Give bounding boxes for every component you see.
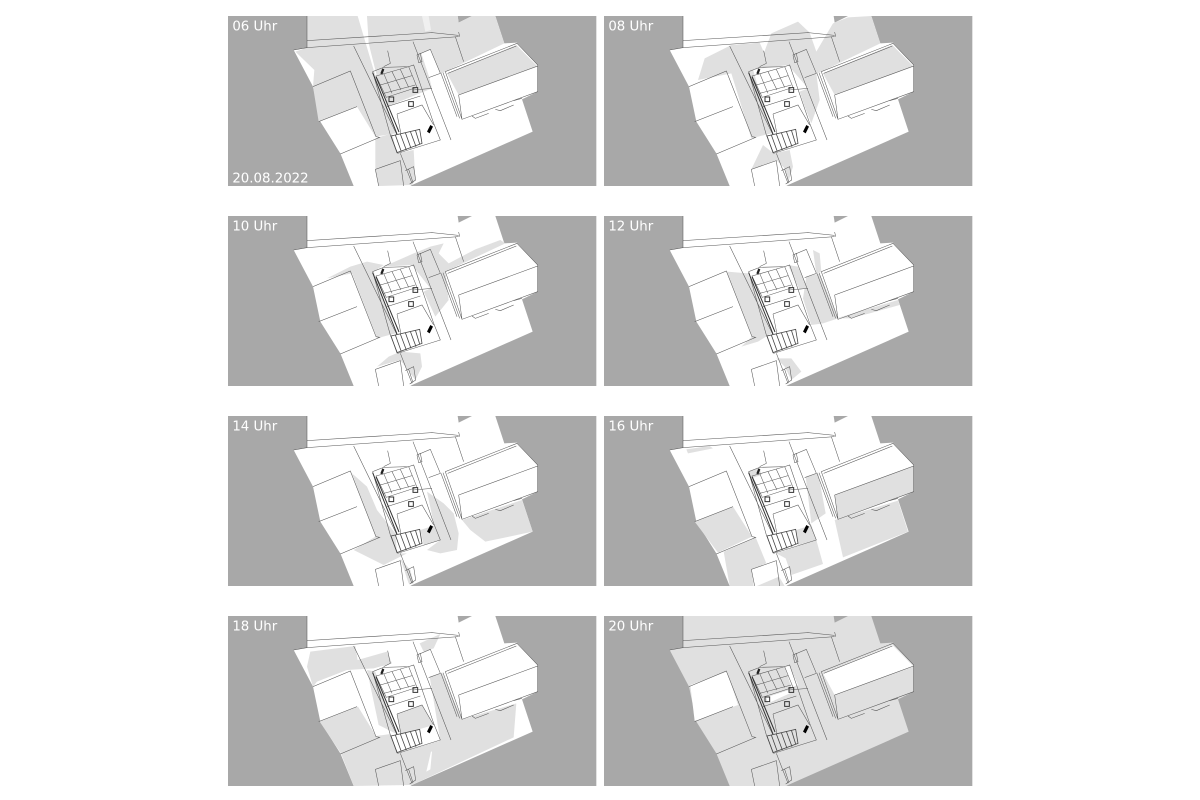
label: 18 Uhr: 18 Uhr xyxy=(232,620,278,635)
label: 08 Uhr: 08 Uhr xyxy=(608,20,654,35)
shadows 18 Uhr xyxy=(307,634,516,786)
label: 20 Uhr: 20 Uhr xyxy=(608,620,654,635)
label: 10 Uhr: 10 Uhr xyxy=(232,220,278,235)
shadows 08 Uhr xyxy=(698,16,914,183)
panel: 10 Uhr xyxy=(228,216,596,386)
panel: 14 Uhr xyxy=(228,416,596,586)
shadows 12 Uhr xyxy=(727,250,900,380)
shadows 14 Uhr xyxy=(352,473,533,583)
label: 14 Uhr: 14 Uhr xyxy=(232,420,278,435)
panel: 12 Uhr xyxy=(604,216,972,386)
shadows 06 Uhr xyxy=(295,16,538,186)
sunlit surfaces 20 Uhr xyxy=(690,645,914,721)
label: 12 Uhr: 12 Uhr xyxy=(608,220,654,235)
panel: 20 Uhr xyxy=(604,616,972,786)
shadows 10 Uhr xyxy=(327,240,505,380)
panel: 06 Uhr xyxy=(228,16,596,187)
panel: 16 Uhr xyxy=(604,416,972,586)
label: 06 Uhr: 06 Uhr xyxy=(232,20,278,35)
panel: 18 Uhr xyxy=(228,616,596,786)
label: date: 20.08.2022 xyxy=(232,172,309,187)
panel: 08 Uhr xyxy=(604,16,972,186)
label: 16 Uhr: 16 Uhr xyxy=(608,420,654,435)
shadows 16 Uhr xyxy=(686,446,914,586)
